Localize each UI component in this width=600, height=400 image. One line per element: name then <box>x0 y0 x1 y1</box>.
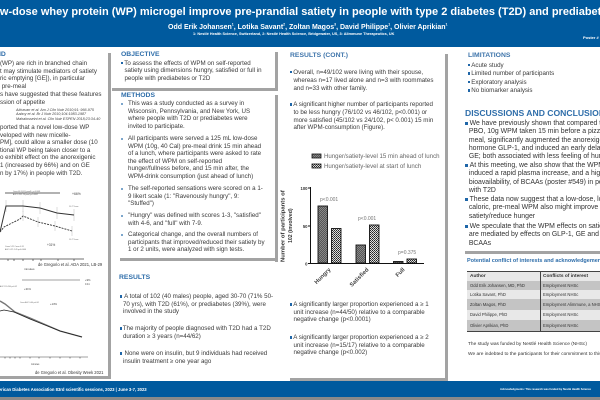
line chart: GLP-1: 10.7 Tmax <box>69 206 78 208</box>
results text 3: A significantly larger proportion experienced a ≥ 1 <box>293 301 429 308</box>
footer: acknowledgments: Acknowledgments: This research was funded by Nestlé Health Science <box>500 388 591 390</box>
line chart: gastric emptying: +9% <box>85 278 91 282</box>
poster number: Poster # <box>583 35 599 40</box>
conclusion bullet 3: satiety/reduce hunger <box>469 213 535 220</box>
background text 3: n by 17%) in people with T2D. <box>0 170 82 177</box>
heading: limitations: LIMITATIONS <box>468 52 510 59</box>
results text 3: unit increase (n=44/50) relative to a comparable <box>293 309 425 316</box>
conclusion bullet 1 <box>465 120 600 160</box>
limitations list: No biomarker analysis <box>471 87 532 94</box>
bar chart: Full <box>395 267 407 279</box>
line chart: gastric emptying: Cmax AUC 0-60 p=0.01 <box>20 301 39 304</box>
conclusion bullet 2 <box>465 162 600 194</box>
results bullet 1: involved in the study <box>123 308 179 315</box>
heading: results: RESULTS <box>119 274 150 281</box>
heading: objective: OBJECTIVE <box>121 51 160 58</box>
methods bullet 4: "Hungry" was defined with scores 1-3, "satisfied" <box>128 212 261 219</box>
methods bullet 3 <box>128 185 263 207</box>
background text 1: t may stimulate mediators of satiety <box>0 68 97 75</box>
conflicts table: Olivier Aprikian, PhD <box>470 322 508 328</box>
line chart: gastric emptying: 0.41 <box>85 283 90 286</box>
conflicts table: Odd Erik Johansen, MD, PhD <box>470 283 525 288</box>
conflicts table: Employment NHSc <box>543 283 578 288</box>
objective text: satiety using dimensions hungry, satisfied or full in <box>124 67 262 74</box>
conflicts table: Employment NHSc <box>543 322 578 328</box>
results text 4: A significantly larger proportion experienced a ≥ 2 <box>293 334 429 341</box>
results text 4 <box>290 334 429 356</box>
conclusion bullet 2: with T2D <box>469 187 496 194</box>
results text 3 <box>290 301 429 323</box>
methods bullet 5: participants that improved/reduced their satiety by <box>128 239 265 246</box>
bar chart: Hungry <box>314 267 333 286</box>
footer band <box>0 381 600 400</box>
conclusion bullet 4: are mediated by effects on GLP-1, GE and <box>469 231 599 238</box>
line chart: GLP-1: Cmax 5.21 Cmax 0.31 <box>5 246 24 248</box>
results bullet 3: None were on insulin, but 9 individuals had received <box>124 350 267 357</box>
background text 1: (WP) are rich in branched chain <box>0 60 87 67</box>
line chart: GLP-1: +31% <box>47 243 55 247</box>
header band <box>0 0 600 47</box>
affiliations: 1: Nestlé Health Science, Switzerland, 2: Nestlé Health Science, Bridgewater, US, 3: Alimmune Therapeutics, UK <box>193 32 394 36</box>
conclusion bullet 1: PBO, 10g WPM taken 15 min before a pizza <box>469 128 600 135</box>
line chart: gastric emptying: +13% <box>50 302 58 306</box>
objective text: people with prediabetes or T2D <box>124 75 210 82</box>
line chart: GLP-1: AUC 0.97-1.45 p=0.0006 <box>5 248 26 251</box>
methods bullet 5: 1 or 2 units, were analyzed with sign tests. <box>128 246 244 253</box>
results text 2: to be less hungry (76/102 vs 46/102, p<0.001) or <box>293 109 427 116</box>
conflicts table: Conflicts of interest <box>543 274 588 278</box>
citation: ADA 2021: de Gregorio et al. ADA 2021, LB-29 <box>38 262 102 266</box>
methods bullet 2: WPM (10g, 40 Cal) pre-meal drink 15 min ahead <box>128 143 261 150</box>
panel: limitations <box>468 52 554 94</box>
panel: discussions and conclusions <box>465 108 600 254</box>
conclusion bullet 4: BCAAs <box>469 240 491 247</box>
background text 2 <box>0 91 102 106</box>
bar chart: Satisfied <box>349 267 371 289</box>
results bullet 2 <box>120 325 271 340</box>
limitations list <box>468 62 554 94</box>
line chart: GLP-1: Cmax 46.3 (6.3) pmol/L; p<0.0001 <box>13 190 40 193</box>
references: Mahalosseini et al. Clin Nutr ESPEN 2018;23:34-40 <box>16 116 100 120</box>
panel: background <box>0 51 111 379</box>
line chart: gastric emptying: +31% <box>24 287 32 291</box>
conflicts table: Author <box>470 274 486 278</box>
citation: Obesity Week 2021: de Gregorio et al. Obesity Week 2021 <box>35 370 103 374</box>
results bullet 3: insulin treatment ≥ one year ago <box>123 358 211 365</box>
panel: methods <box>120 92 278 262</box>
results bullet 2: The majority of people diagnosed with T2D had a T2D <box>123 325 271 332</box>
results text 2: after WPM-consumption (Figure). <box>293 124 385 131</box>
background text 3: PM], could allow a smaller dose (10 <box>0 139 98 146</box>
bar chart: 102 (involved) <box>288 208 294 243</box>
methods bullet 4 <box>128 212 261 227</box>
panel: results <box>119 274 273 365</box>
bar chart: 50 <box>303 224 308 229</box>
conflicts table: Employment NHSc <box>543 312 578 316</box>
results bullet 3 <box>120 350 267 365</box>
results bullet 1: 70 yrs), with T2D (61%), or prediabetes (39%), were <box>123 301 266 308</box>
funding statement: The study was funded by Nestlé Health Science (NHSc) <box>468 342 587 346</box>
line chart: GLP-1 <box>0 190 84 271</box>
bar chart: p<0.001 <box>320 197 338 203</box>
references <box>16 108 100 120</box>
line chart: gastric emptying: minutes <box>31 363 40 366</box>
references: Aaboy et al. Br J Nutr 2010;104:1983-1987 <box>16 112 86 116</box>
conflicts table <box>467 270 600 332</box>
line chart: GLP-1: 10.7 Tmax <box>69 239 78 241</box>
conflicts table: Lotika Savant, PhD <box>470 292 506 296</box>
conflicts table: Employment NHSc <box>543 292 578 296</box>
background text 2: s have suggested that these features <box>0 91 101 98</box>
conclusion bullet 3 <box>465 196 600 220</box>
bullet markers <box>121 103 123 236</box>
limitations list: Exploratory analysis <box>471 78 527 86</box>
bar chart: p=0.375 <box>398 250 416 256</box>
heading: results continued: RESULTS (CONT.) <box>290 52 348 59</box>
results text 2: A significant higher number of participants reported <box>293 101 433 108</box>
heading: methods: METHODS <box>121 92 155 99</box>
panel: results continued <box>280 52 448 381</box>
methods bullet 2 <box>128 135 261 180</box>
objective text <box>121 60 262 82</box>
panel: objective <box>112 51 278 91</box>
results text 1: and n=33 with other family. <box>293 84 367 92</box>
background text 2: ssion of appetite <box>0 99 45 106</box>
methods bullet 4: with 4-6, and "full" with 7-9. <box>128 220 203 227</box>
results bullet 1 <box>120 293 273 315</box>
legend: Hunger/satiety-level 15 min ahead of lunch <box>324 153 440 160</box>
line chart: GLP-1: +66% <box>72 192 81 196</box>
line chart: GLP-1: minutes <box>24 267 35 271</box>
methods bullet 2: the effect of WPM on self-reported <box>128 158 222 165</box>
background text 3 <box>0 124 98 177</box>
results text 2: more satisfied (45/102 vs 24/102, p< 0.001) 15 min <box>293 117 433 124</box>
methods bullet 3: 9 likert scale (1: "Ravenously hungry", 9: <box>128 193 239 200</box>
methods bullet 2: hunger/fullness before, and 15 min after, the <box>128 165 249 172</box>
objective text: To assess the effects of WPM on self-reported <box>124 60 251 66</box>
methods bullet 3: The self-reported sensations were scored on a 1- <box>128 185 263 192</box>
limitations list: Limited number of participants <box>471 70 554 77</box>
background text 1 <box>0 60 97 90</box>
line chart: gastric emptying <box>0 278 91 366</box>
line chart: gastric emptying: AUC 120-240 p=0.02 <box>0 285 17 288</box>
line chart: GLP-1: AUC 0.76-1.14 pmol; p<0.0001 <box>13 193 38 196</box>
methods bullet 1: invited to participate. <box>128 123 185 130</box>
methods bullet 1: Wisconsin, Pennsylvania, and New York, US <box>128 108 250 115</box>
bar chart: 0 <box>305 262 308 266</box>
background text 3: tional WP being taken closer to a <box>0 147 90 154</box>
results text 1: whereas n=17 lived alone and n=3 with roommates <box>293 76 433 84</box>
legend <box>312 153 440 170</box>
methods bullet 3: "Stuffed") <box>128 200 154 207</box>
conclusion bullet 3: caloric, pre-meal WPM also might improve <box>469 204 598 211</box>
background text 1: pre-meal <box>2 83 26 90</box>
methods bullet 2: All participants were served a 125 mL low-dose <box>128 135 257 142</box>
bar chart: p<0.001 <box>358 216 376 222</box>
results text 1 <box>290 68 434 92</box>
results bullet 2: duration ≥ 3 years (n=44/62) <box>123 333 201 340</box>
results text 3: negative change (p<0.0001) <box>293 316 371 323</box>
background text 3: ported that a novel low-dose WP <box>0 124 89 131</box>
conclusion bullet 2: At this meeting, we also show that the WPM <box>470 162 600 169</box>
bar chart: 100 <box>300 186 308 191</box>
methods bullet 1: This was a study conducted as a survey in <box>128 100 244 107</box>
authors: Odd Erik Johansen1, Lotika Savant2, Zoltan Magos3, David Philippe1, Olivier Aprikian1 <box>168 23 447 31</box>
conflicts table: Zoltan Magos, PhD <box>470 302 506 306</box>
results bullet 1: A total of 102 (40 males) people, aged 30-70 (71% 50- <box>124 293 273 300</box>
bar chart: Number of participants of <box>280 190 286 262</box>
results text 4: negative change (p<0.002) <box>293 349 367 356</box>
conflicts table: David Philippe, PhD <box>470 312 507 316</box>
references: Akhavan et al. Am J Clin Nutr 2010;91: 966-975 <box>16 108 94 112</box>
methods bullet 5 <box>128 231 265 253</box>
methods bullet 2: WPM-drink consumption (just ahead of lunch) <box>128 173 253 180</box>
background text 3: o exhibit effect on the anorexigenic <box>0 154 96 161</box>
results text 1: Overall, n=49/102 were living with their spouse, <box>293 68 423 76</box>
background text 3: 1 (increased by 66%) and on GE <box>0 162 90 169</box>
methods bullet 5: Categorical change, and the overall numbers of <box>128 231 258 238</box>
results text 4: unit increase (n=15/17) relative to a comparable <box>293 342 425 349</box>
methods bullet 2: of a lunch, where participants were asked to rate <box>128 150 261 157</box>
conclusion bullet 4 <box>465 222 600 247</box>
limitations list: Acute study <box>471 62 504 68</box>
results text 2 <box>290 101 433 131</box>
methods bullet 1 <box>128 100 250 130</box>
background text 1: ric emptying [GE]), in particular <box>0 75 85 82</box>
legend: Hunger/satiety-level at start of lunch <box>324 163 421 170</box>
methods bullet 1: where people with T2D or prediabetes were <box>128 115 248 122</box>
background text 3: veloped with new micelle- <box>0 132 71 139</box>
bar chart <box>280 153 440 289</box>
panel: conflicts of interest <box>467 258 600 356</box>
